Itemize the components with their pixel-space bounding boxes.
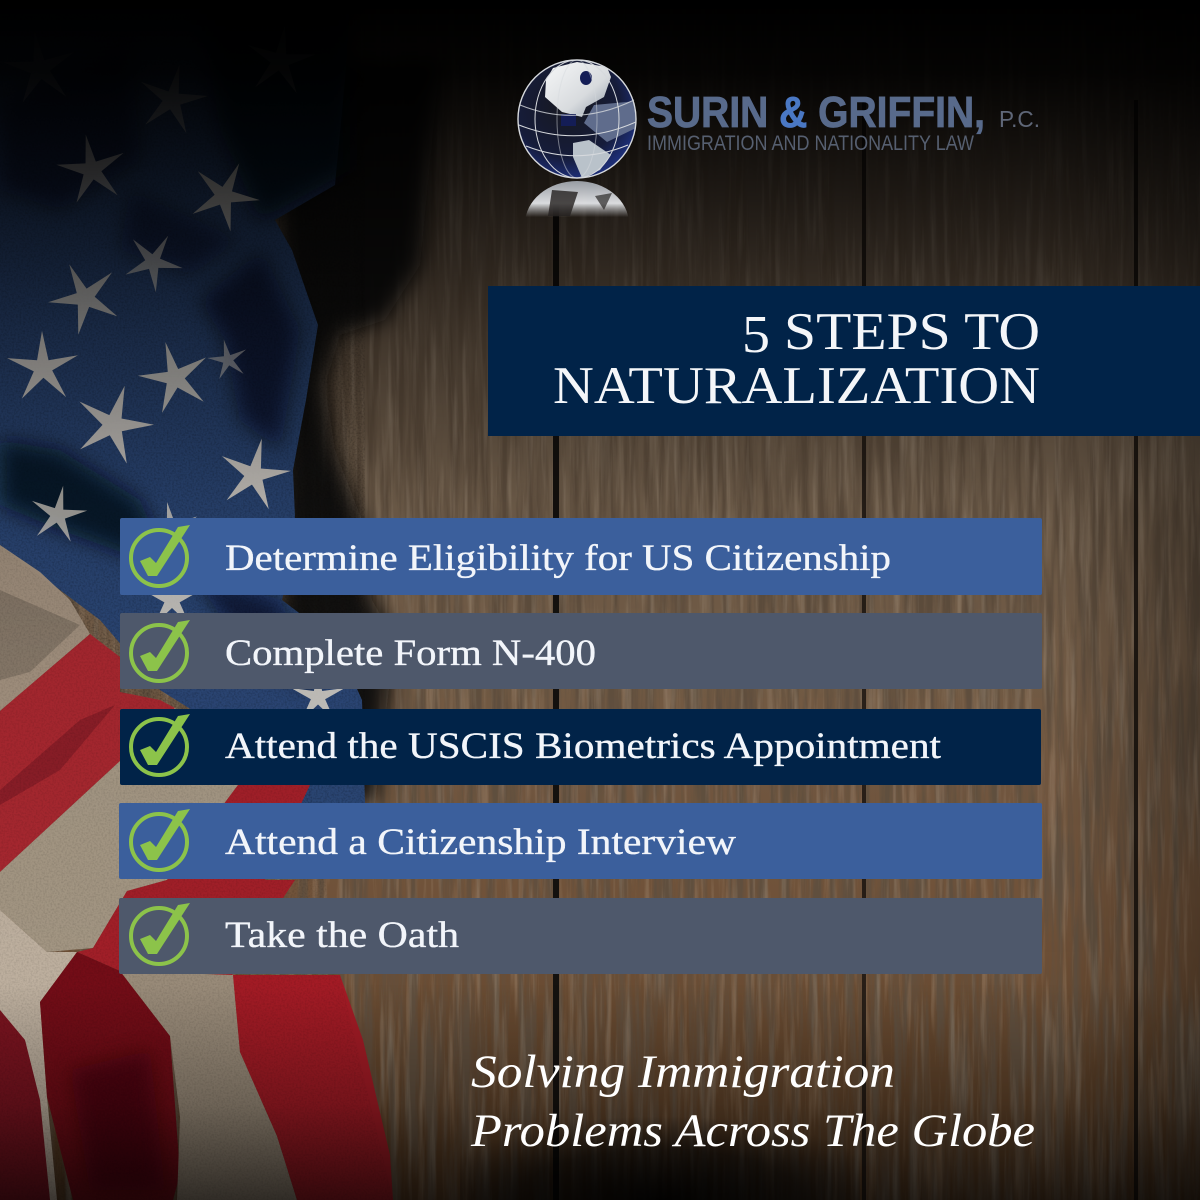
step 3 text: Attend the USCIS Biometrics Appointment	[225, 726, 942, 767]
title panel	[488, 286, 1200, 436]
tagline	[470, 1046, 1035, 1157]
step 4	[119, 803, 1042, 879]
icon: globe	[518, 60, 637, 178]
flag: blue canton with stars	[0, 0, 365, 803]
step 1 text: Determine Eligibility for US Citizenship	[225, 538, 891, 579]
title: 5	[742, 306, 770, 364]
tagline: Problems Across The Globe	[470, 1105, 1035, 1157]
title	[553, 303, 1040, 415]
step 2 text: Complete Form N-400	[225, 633, 596, 674]
step 4 text: Attend a Citizenship Interview	[225, 822, 736, 863]
firm tagline: IMMIGRATION AND NATIONALITY LAW	[647, 132, 974, 155]
icon: globe reflection	[526, 181, 628, 216]
icon: check mark	[131, 809, 190, 870]
firm suffix: P.C.	[999, 106, 1040, 132]
flag folds	[0, 0, 350, 690]
icon: check mark	[131, 620, 190, 681]
step 5 text: Take the Oath	[225, 915, 460, 956]
step 1	[120, 518, 1042, 595]
step 2	[120, 613, 1042, 689]
step 3	[120, 709, 1041, 785]
icon: check mark	[131, 525, 190, 586]
title: NATURALIZATION	[553, 357, 1040, 415]
step 5	[119, 898, 1042, 974]
title: STEPS TO	[784, 303, 1040, 361]
flag: red and white stripes	[0, 545, 400, 1200]
flag stars	[0, 20, 345, 720]
icon: check mark	[131, 714, 190, 775]
icon: check mark	[131, 903, 190, 964]
logo: Surin & Griffin	[517, 59, 1038, 216]
firm name: SURIN & GRIFFIN,	[647, 88, 985, 137]
tagline: Solving Immigration	[471, 1046, 895, 1098]
